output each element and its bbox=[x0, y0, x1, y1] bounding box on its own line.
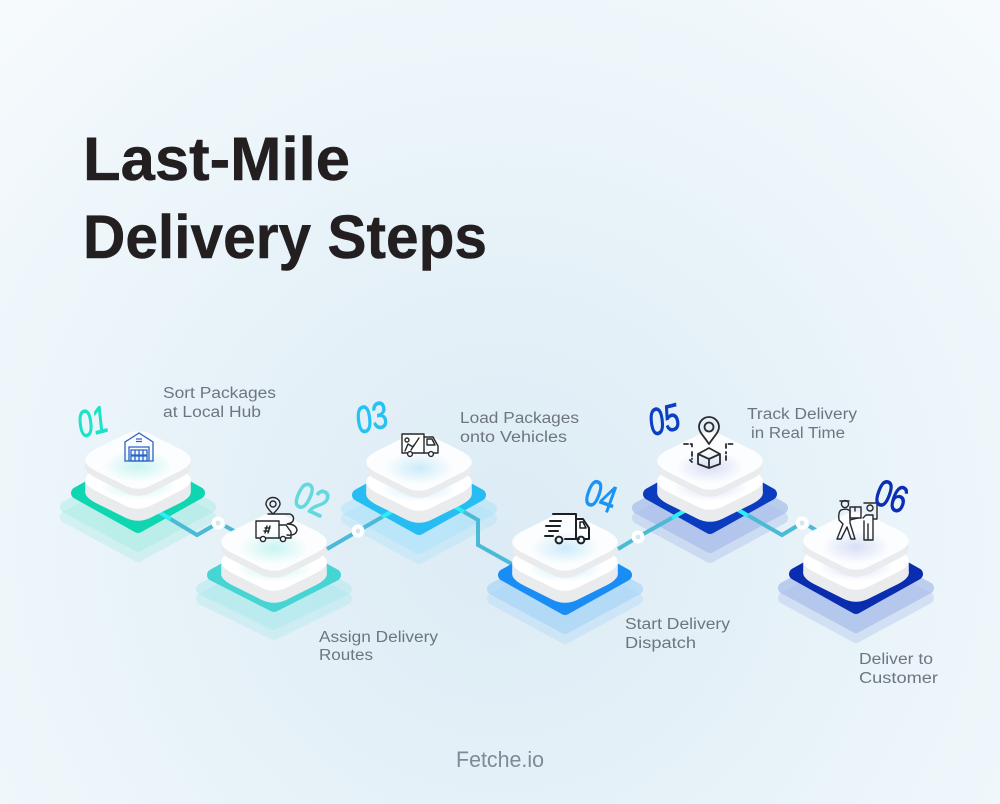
label: track delivery: Track Delivery bbox=[747, 406, 857, 423]
icon: tracking pin and box bbox=[684, 417, 735, 468]
step 6 bbox=[784, 472, 938, 687]
number 02: 02 bbox=[287, 474, 336, 527]
label: deliver to customer: Deliver to bbox=[859, 651, 933, 668]
label: start dispatch: Start Delivery bbox=[625, 616, 730, 633]
step 4 bbox=[493, 472, 730, 652]
number 05: 05 bbox=[644, 396, 685, 445]
step 3 bbox=[327, 394, 579, 564]
label: track delivery bbox=[747, 406, 857, 442]
title: Last-Mile bbox=[83, 125, 350, 193]
icon: loading van bbox=[402, 434, 438, 456]
label: assign routes: Assign Delivery bbox=[319, 629, 438, 646]
title: Delivery Steps bbox=[83, 203, 487, 271]
brand: Fetche.io: Fetche.io bbox=[456, 747, 544, 772]
number 06: 06 bbox=[869, 472, 913, 522]
connector 3 to 4 bbox=[452, 505, 512, 564]
number 04: 04 bbox=[579, 472, 622, 522]
number 03: 03 bbox=[351, 394, 392, 443]
label: load packages: Load Packages bbox=[460, 410, 579, 427]
label: track delivery: in Real Time bbox=[751, 425, 845, 442]
step 1 bbox=[66, 385, 276, 556]
label: deliver to customer bbox=[859, 651, 938, 687]
step 2 bbox=[202, 474, 438, 664]
icon: routed truck bbox=[256, 498, 297, 542]
label: load packages: onto Vehicles bbox=[460, 429, 567, 446]
label: start dispatch: Dispatch bbox=[625, 635, 696, 652]
label: sort packages: at Local Hub bbox=[163, 404, 261, 421]
icon: delivery truck bbox=[545, 514, 589, 543]
connector 4 to 5 bbox=[618, 510, 686, 549]
label: assign routes: Routes bbox=[319, 647, 373, 664]
icon: courier handing parcel to customer bbox=[837, 500, 877, 540]
label: sort packages bbox=[163, 385, 276, 421]
label: sort packages: Sort Packages bbox=[163, 385, 276, 402]
number 01: 01 bbox=[73, 399, 112, 447]
label: load packages bbox=[460, 410, 579, 446]
title bbox=[83, 125, 487, 271]
icon: warehouse bbox=[125, 433, 153, 461]
label: assign routes bbox=[319, 629, 438, 664]
label: deliver to customer: Customer bbox=[859, 670, 938, 687]
connector 2 to 3 bbox=[327, 509, 396, 549]
step 5 bbox=[618, 396, 857, 557]
label: start dispatch bbox=[625, 616, 730, 652]
connector 5 to 6 bbox=[735, 508, 819, 535]
connector 1 to 2 bbox=[157, 511, 236, 535]
